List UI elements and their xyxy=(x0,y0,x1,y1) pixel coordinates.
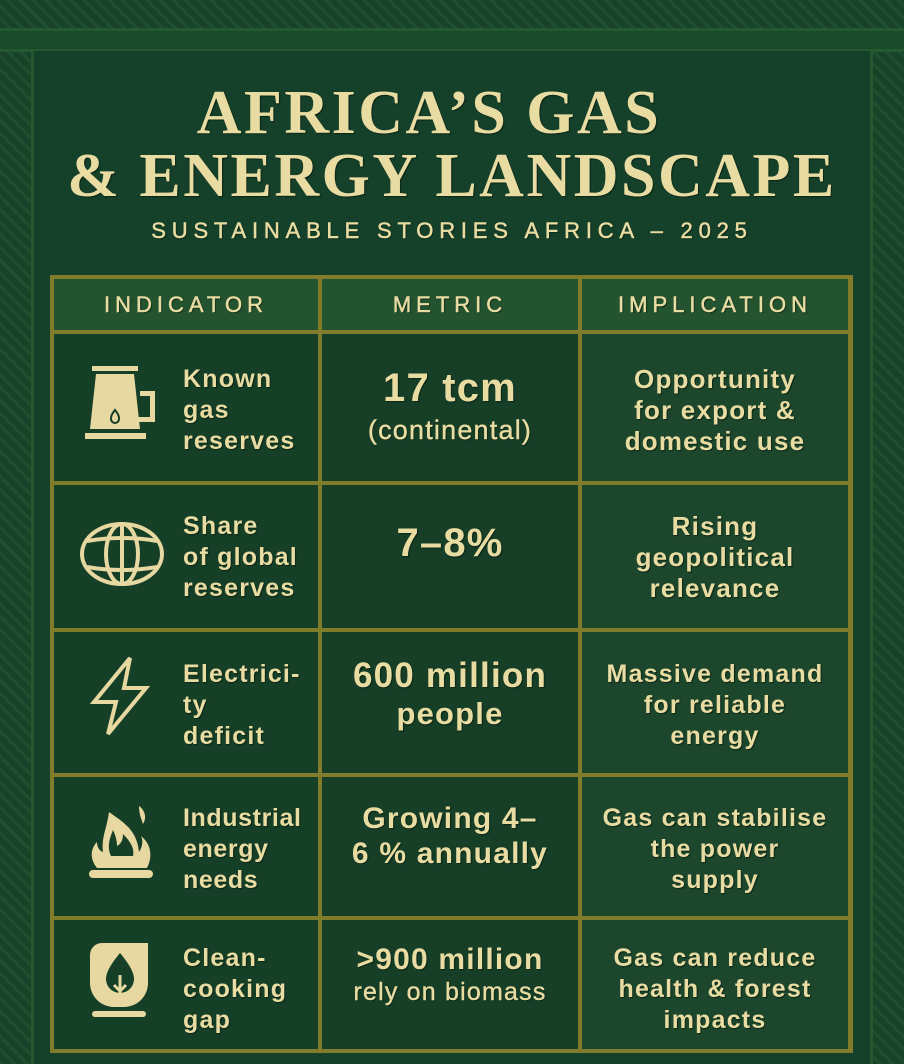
table xyxy=(50,275,853,1053)
text: industrial energy needs: energy xyxy=(183,835,269,863)
metric: growing 4-6%: Growing 4– xyxy=(362,802,538,835)
icon: lightning xyxy=(90,656,150,736)
icon: globe xyxy=(80,522,164,586)
subtitle: SUSTAINABLE STORIES AFRICA – 2025 xyxy=(151,218,753,243)
text: industrial energy needs: Industrial xyxy=(183,804,302,832)
implication 1: for export & xyxy=(634,395,796,425)
implication 2: Rising xyxy=(672,511,758,541)
text: electricity deficit: deficit xyxy=(183,722,265,750)
text: known gas reserves: reserves xyxy=(183,427,295,455)
implication 3: energy xyxy=(670,722,760,750)
implication 5 xyxy=(613,944,816,1034)
text: share of global reserves: Share xyxy=(183,512,258,540)
metric: 600 million: 600 million xyxy=(353,656,547,695)
implication 2: relevance xyxy=(650,573,780,603)
metric: growing 4-6%: 6 % annually xyxy=(352,837,548,870)
implication 4: Gas can stabilise xyxy=(603,804,827,832)
title xyxy=(67,79,837,210)
implication 5: Gas can reduce xyxy=(613,944,816,972)
text: share of global reserves: of global xyxy=(183,543,298,571)
implication 3: Massive demand xyxy=(607,660,823,688)
text: clean cooking gap: cooking xyxy=(183,975,287,1003)
text: share of global reserves: reserves xyxy=(183,574,295,602)
implication 5: impacts xyxy=(664,1006,766,1034)
text: clean cooking gap xyxy=(183,944,287,1034)
header: implication: IMPLICATION xyxy=(618,292,812,317)
implication 3 xyxy=(607,660,823,750)
implication 4 xyxy=(603,804,827,894)
text: rely on biomass xyxy=(353,978,547,1006)
text: industrial energy needs xyxy=(183,804,302,894)
text: electricity deficit: ty xyxy=(183,691,208,719)
text: clean cooking gap: gap xyxy=(183,1006,231,1034)
icon: clean cooking leaf xyxy=(90,943,148,1017)
icon: gas container xyxy=(85,366,155,439)
implication 1 xyxy=(625,364,805,456)
metric: >900 million: >900 million xyxy=(356,943,543,976)
text: clean cooking gap: Clean- xyxy=(183,944,267,972)
text: (continental) xyxy=(368,415,532,445)
implication 2: geopolitical xyxy=(636,542,794,572)
implication 5: health & forest xyxy=(618,975,812,1003)
text: share of global reserves xyxy=(183,512,298,602)
implication 2 xyxy=(636,511,794,603)
metric: 600 million xyxy=(353,656,547,732)
header: metric: METRIC xyxy=(393,292,507,317)
metric: growing 4-6% xyxy=(352,802,548,870)
implication 4: supply xyxy=(671,866,759,894)
implication 1: domestic use xyxy=(625,426,805,456)
metric: 600 million: people xyxy=(396,696,504,731)
header cells xyxy=(54,279,318,330)
body cells backgrounds xyxy=(54,334,318,481)
metric: 7-8%: 7–8% xyxy=(396,521,504,565)
implication 1: Opportunity xyxy=(634,364,796,394)
top band xyxy=(0,28,904,52)
text: electricity deficit: Electrici- xyxy=(183,660,301,688)
implication 4: the power xyxy=(651,835,779,863)
title: & ENERGY LANDSCAPE xyxy=(67,142,837,210)
text: known gas reserves: gas xyxy=(183,396,230,424)
text: known gas reserves xyxy=(183,365,295,455)
icon: flame xyxy=(89,806,153,878)
implication 3: for reliable xyxy=(644,691,786,719)
title: AFRICA’S GAS xyxy=(197,79,661,147)
text: industrial energy needs: needs xyxy=(183,866,258,894)
text: known gas reserves: Known xyxy=(183,365,272,393)
text: electricity deficit xyxy=(183,660,301,750)
header: indicator: INDICATOR xyxy=(104,292,268,317)
metric: 17 tcm: 17 tcm xyxy=(383,366,517,410)
